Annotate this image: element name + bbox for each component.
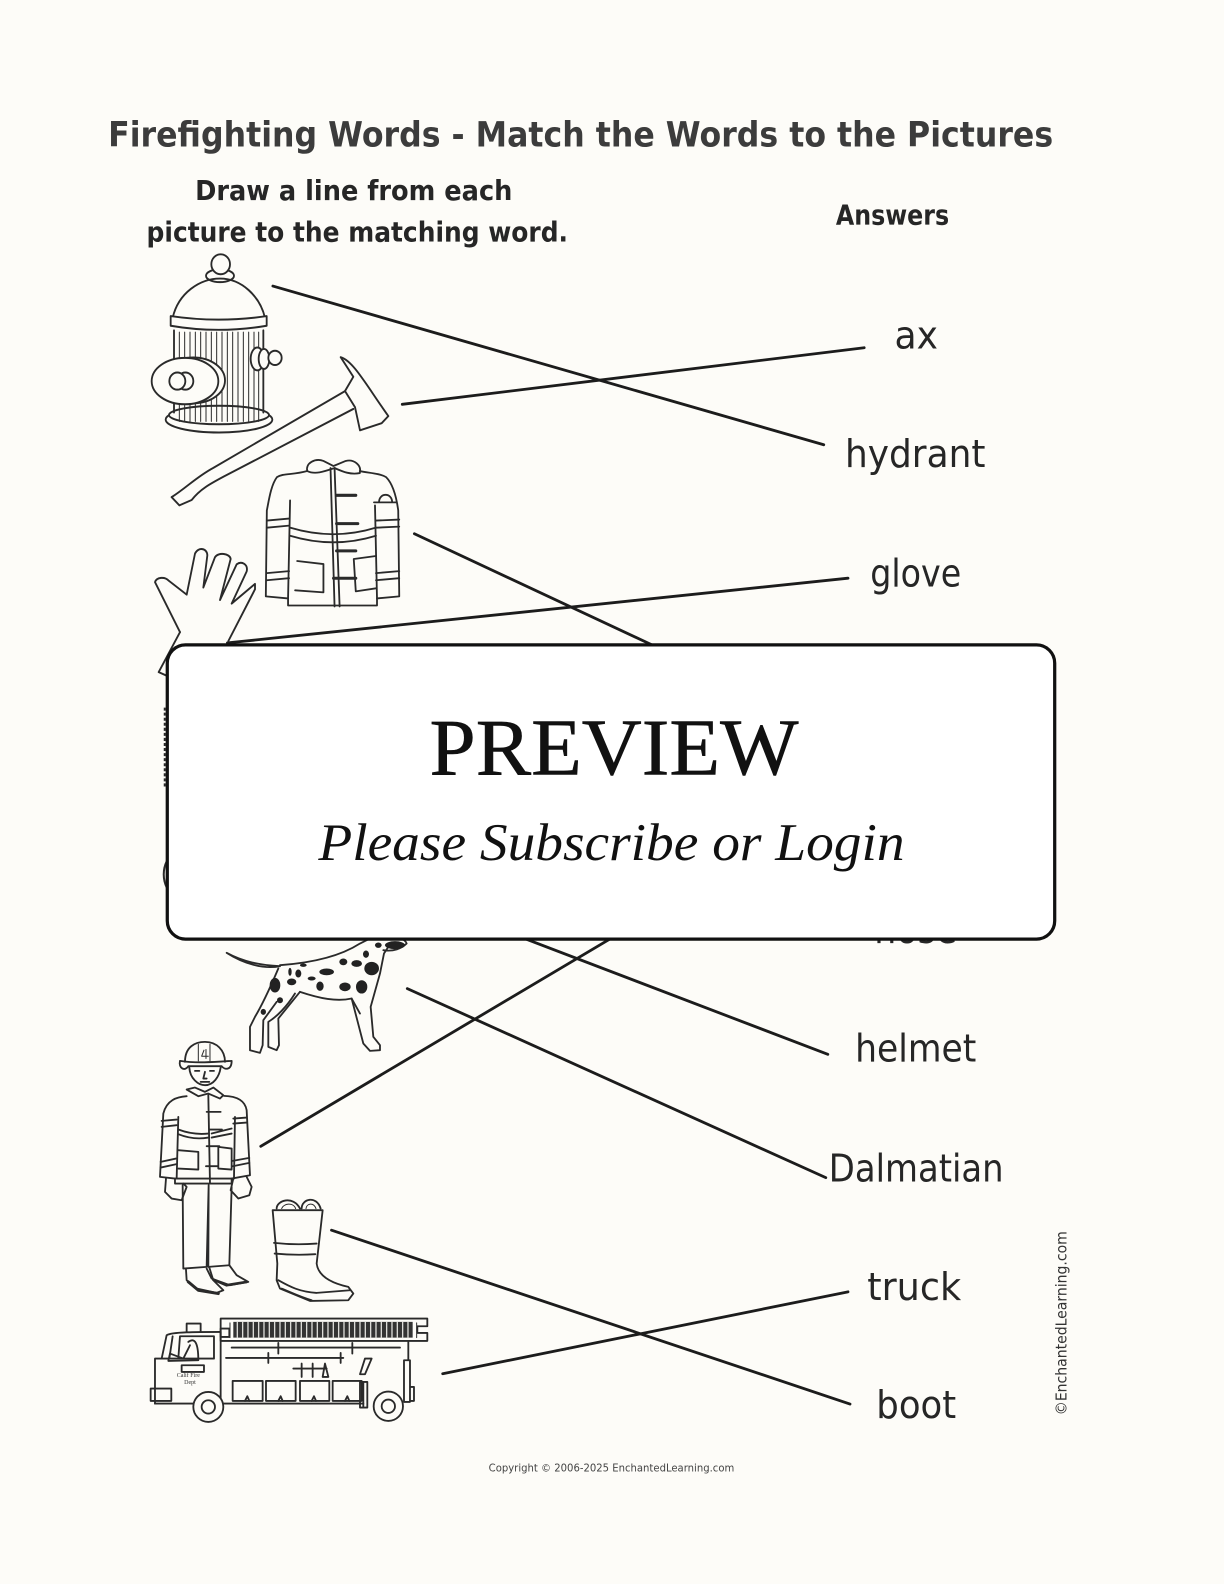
icon: dalmatian [227,937,407,1053]
icon: fire truck: Calif Fire [177,1372,200,1379]
icon: fire truck: Dept [184,1380,196,1386]
icon: fire truck [151,1319,427,1422]
instructions: picture to the matching word. [147,218,568,249]
title: Firefighting Words - Match the Words to the Pictures [108,116,1053,156]
word list: helmet [855,1026,976,1071]
word list: glove [870,551,961,596]
word list: truck [867,1265,962,1310]
word list: boot [876,1383,956,1428]
instructions: Draw a line from each [195,176,512,207]
preview overlay: Please Subscribe or Login [317,814,905,872]
word list: Dalmatian [829,1147,1004,1192]
icon: ax [172,357,388,505]
preview overlay [167,645,1055,939]
icon: firefighter [160,1042,252,1294]
word list: hydrant [845,432,985,477]
icon: boot [273,1200,353,1301]
icon: jacket [266,460,399,607]
preview overlay: PREVIEW [430,703,799,792]
answer lines [227,286,864,1404]
word list: ax [895,314,938,359]
answers heading: Answers [836,200,949,231]
icon: glove [155,549,255,676]
icon: hydrant [152,254,282,433]
icon: hose fragment beside preview box [164,708,167,888]
copyright: Copyright © 2006-2025 EnchantedLearning.com [489,1461,734,1474]
word list: hose [874,908,957,953]
instructions [147,176,568,249]
vertical credit: ©EnchantedLearning.com [1052,1231,1070,1415]
word list [829,314,1004,1428]
